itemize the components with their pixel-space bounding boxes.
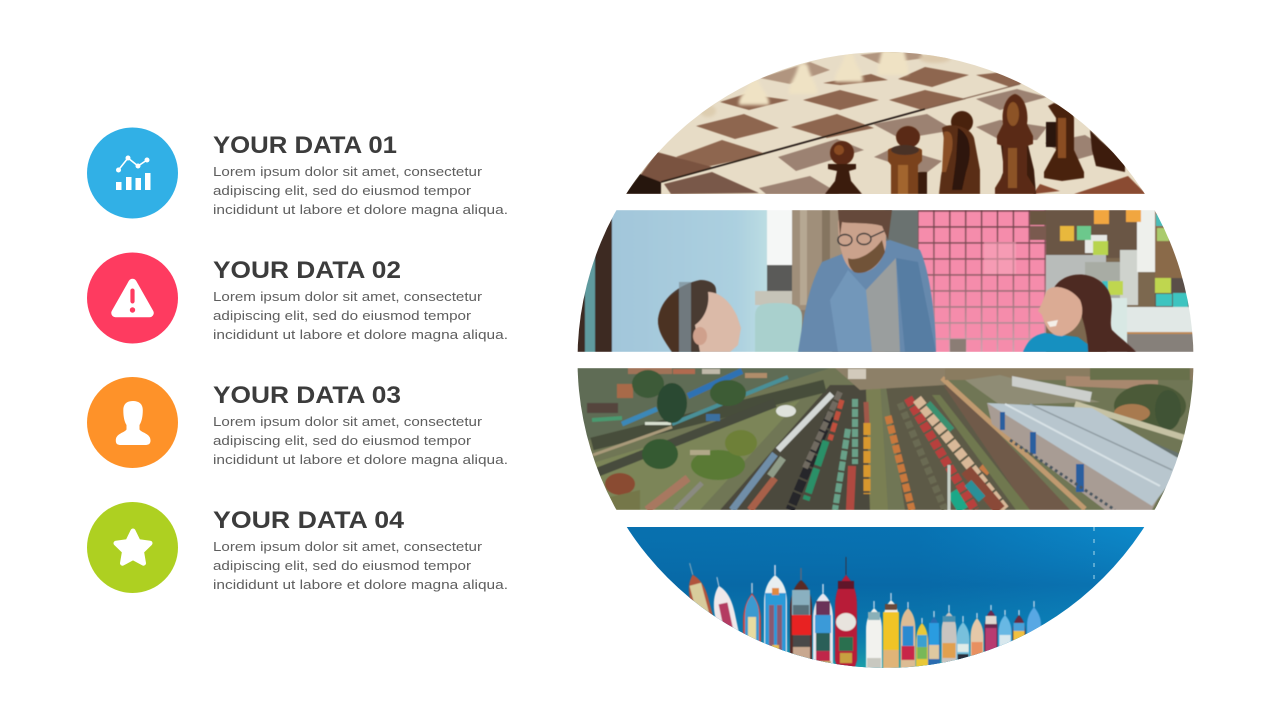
woman <box>1023 274 1136 352</box>
back office <box>1046 258 1156 344</box>
row 4: your data 04 <box>87 502 508 593</box>
row 1: your data 01 <box>87 128 508 218</box>
black pieces <box>825 94 1125 194</box>
row 2: your data 02 <box>87 252 508 344</box>
board frame <box>637 152 712 182</box>
text block 03: Lorem ipsum dolor sit amet, consectetur <box>213 414 483 429</box>
photo strip: boats on the sea <box>626 527 1144 668</box>
icon: person <box>87 377 178 468</box>
heading 03: YOUR DATA 03 <box>213 382 401 409</box>
dark squares left board <box>676 48 1023 167</box>
heading 01: YOUR DATA 01 <box>213 132 397 159</box>
dark squares right board <box>759 89 1110 194</box>
icon: warning triangle <box>87 252 178 344</box>
curtain <box>792 210 842 310</box>
far-right pieces <box>1044 103 1084 181</box>
text block 02: adipiscing elit, sed do eiusmod tempor <box>213 308 472 323</box>
photo strip: office meeting <box>570 210 1200 352</box>
circular photo collage <box>578 52 1194 668</box>
chair <box>755 303 802 352</box>
man centre <box>798 210 936 352</box>
man left <box>658 280 741 352</box>
icon: star <box>87 502 178 593</box>
text block 01: Lorem ipsum dolor sit amet, consectetur <box>213 164 483 179</box>
window <box>767 210 793 266</box>
station building <box>987 403 1162 510</box>
text block 04 <box>213 539 508 592</box>
text block 02: incididunt ut labore et dolore magna aliqua. <box>213 327 508 342</box>
white pawns <box>700 50 951 117</box>
rook and pawn behind <box>896 126 920 148</box>
text block 01: adipiscing elit, sed do eiusmod tempor <box>213 183 472 198</box>
buildings top-left <box>617 384 633 398</box>
knight and pawn behind <box>951 111 973 133</box>
rails and wall by station <box>943 385 1070 510</box>
heading 02: YOUR DATA 02 <box>213 257 401 284</box>
heading 04: YOUR DATA 04 <box>213 507 405 534</box>
icon: bar and line chart <box>87 128 178 218</box>
sticky note wall <box>918 210 1046 352</box>
text block 04: adipiscing elit, sed do eiusmod tempor <box>213 558 472 573</box>
text block 04: Lorem ipsum dolor sit amet, consectetur <box>213 539 483 554</box>
text block 01: incididunt ut labore et dolore magna aliqua. <box>213 202 508 217</box>
wall and road behind station <box>1152 442 1179 458</box>
boats left group <box>688 562 714 616</box>
text block 02: Lorem ipsum dolor sit amet, consectetur <box>213 289 483 304</box>
train lines right bundle <box>888 398 1005 510</box>
row 3: your data 03 <box>87 377 508 468</box>
train lines left bundle <box>732 392 867 510</box>
upper right town <box>945 368 1195 380</box>
text block 02 <box>213 289 508 342</box>
text block 03 <box>213 414 508 467</box>
text block 01 <box>213 164 508 217</box>
photo strip: chess board <box>626 52 1145 194</box>
bishop <box>1000 144 1036 194</box>
pawn <box>830 141 854 165</box>
text block 03: adipiscing elit, sed do eiusmod tempor <box>213 433 472 448</box>
text block 04: incididunt ut labore et dolore magna aliqua. <box>213 577 508 592</box>
photo strip: rail yard <box>570 368 1200 510</box>
boats right group <box>865 600 883 668</box>
trees <box>632 370 664 398</box>
tracks and roads <box>592 386 825 444</box>
text block 03: incididunt ut labore et dolore magna aliqua. <box>213 452 508 467</box>
